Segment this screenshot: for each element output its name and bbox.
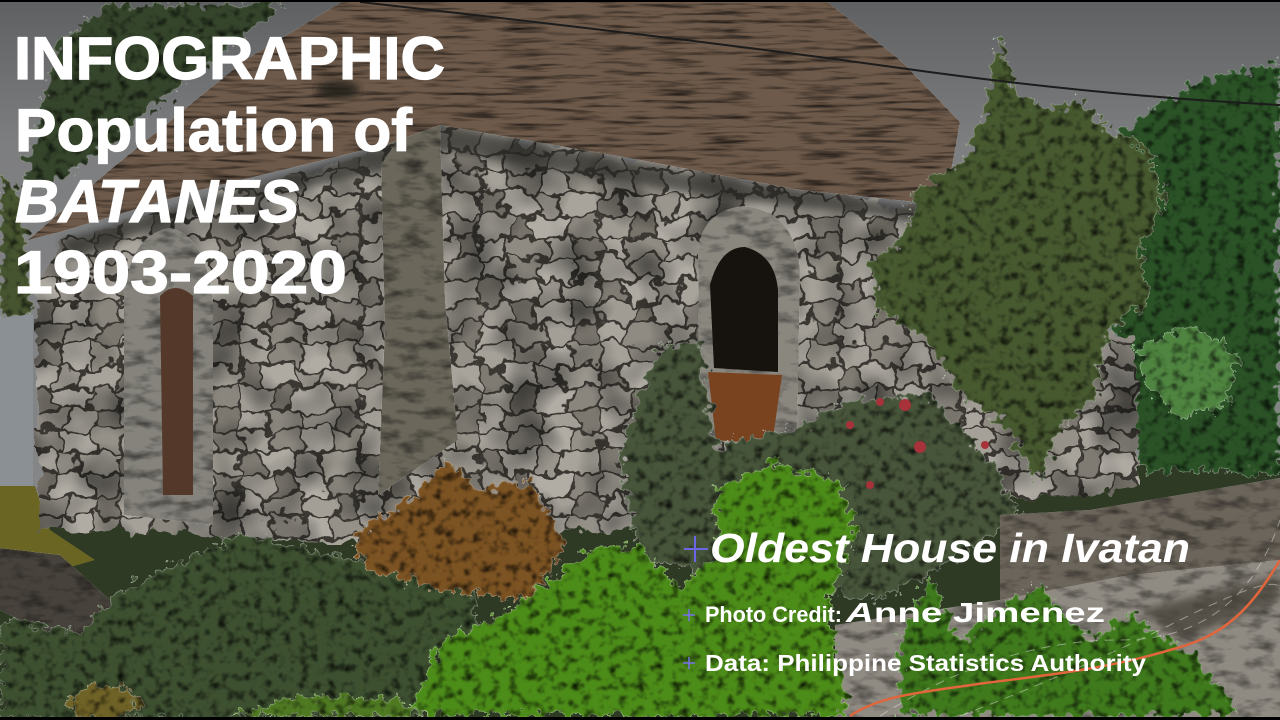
red flowers [846,398,989,489]
ground underlay [0,460,1280,720]
croton plant [350,460,565,600]
title line 2: Population of [15,97,413,164]
window wood sill and lower panel [708,372,782,445]
plus marker 2 [683,609,695,621]
metal shed [0,314,33,486]
photo credit name: A nne Jimenez [845,597,1105,628]
left door [160,288,193,495]
plus marker 3 [683,657,695,669]
photo credit label: Photo Credit: [705,602,842,627]
palm-like plant, right [1138,325,1240,420]
caption block [683,525,1190,676]
plus marker 1 [684,536,708,562]
right background foliage [1110,60,1280,475]
right window opening [710,247,778,372]
title line 1: INFOGRAPHIC [14,25,445,92]
left door frame [124,228,213,525]
dashed white decorative curves [880,520,1280,716]
data source: Data: Philippine Statistics Authority [705,650,1146,676]
orange trend curve [850,560,1280,716]
house wall [34,125,1140,545]
right window frame [698,206,800,445]
rock, bottom left [0,548,135,680]
concrete lower wall, right [835,560,1280,720]
right tree [870,35,1165,480]
dark gap in thatch [316,81,360,99]
title line 3: BATANES [15,168,299,235]
foliage on left edge [0,175,32,318]
thatched roof [28,0,960,240]
climbing plant by window [620,340,1020,600]
shrubs, right [900,575,1240,716]
title [14,25,445,306]
bright green bushes [410,462,858,716]
title line 4: 1903-2020 [14,239,347,306]
concrete upper wall, right [1000,478,1280,610]
yellow shrub, bottom left [70,685,140,720]
dark ledge on concrete [1140,575,1280,640]
shadow under the eave [60,125,925,260]
grass [0,486,95,570]
caption heading: Oldest House in Ivatan [710,525,1190,571]
bushes, bottom left [0,535,480,720]
power line [360,2,1280,105]
small green shrub, bottom [230,695,430,716]
buttress [378,115,458,495]
tree behind the roof, top left [25,2,285,190]
